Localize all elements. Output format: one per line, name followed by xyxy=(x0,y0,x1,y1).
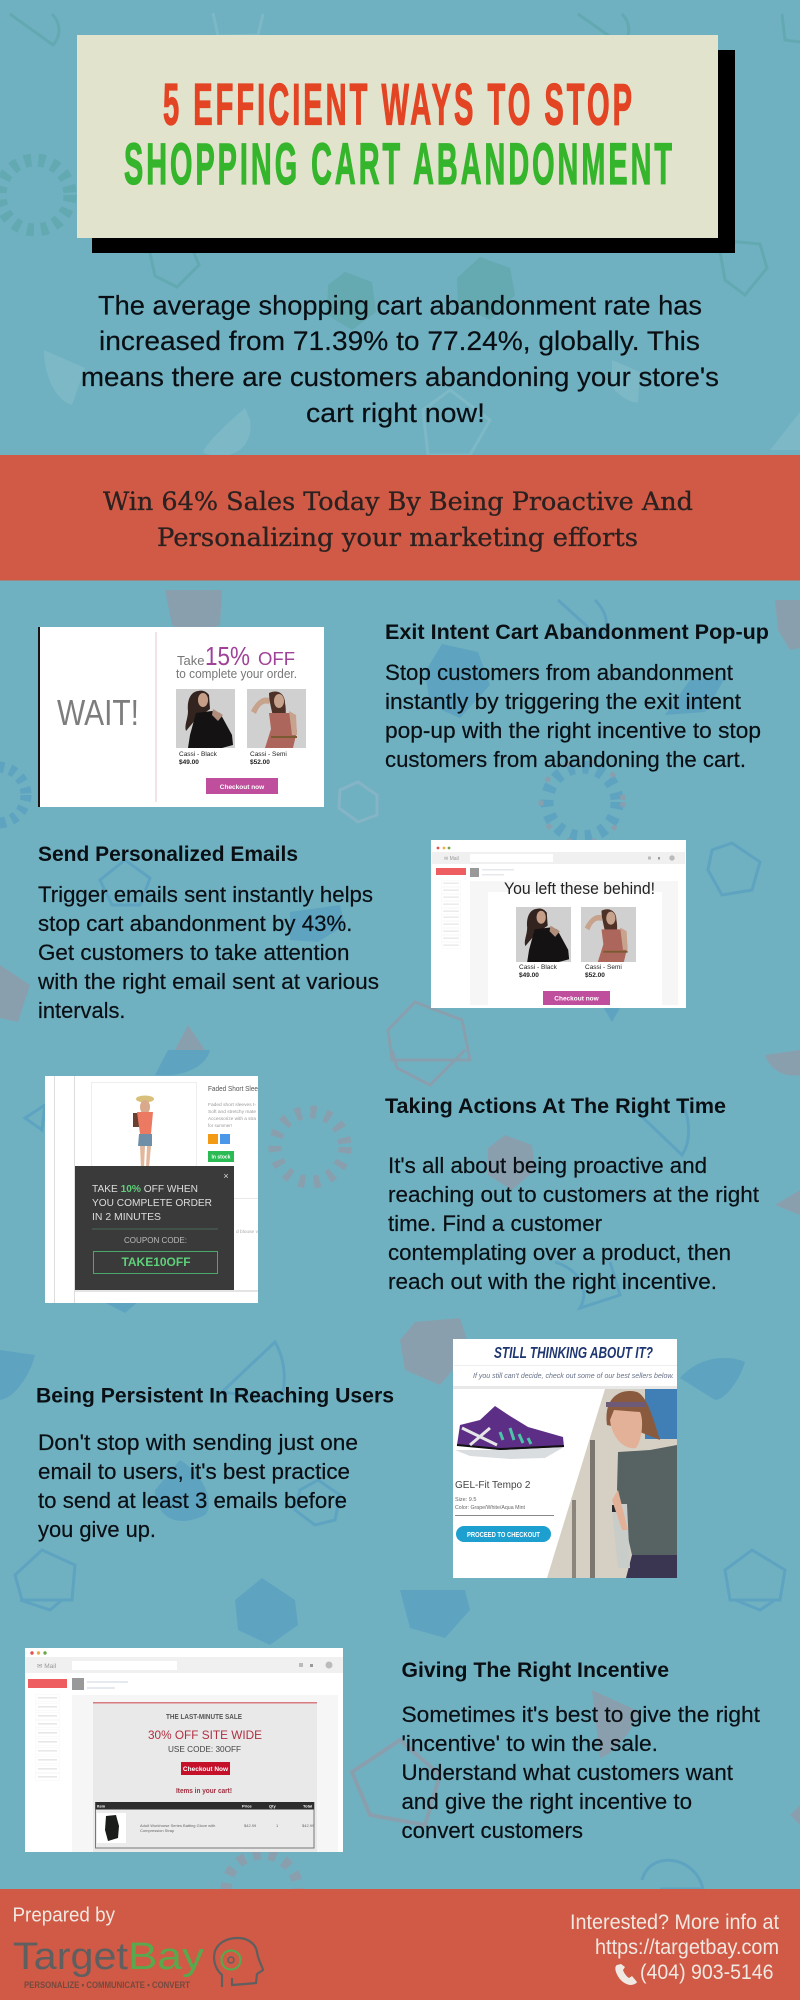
section 1 text xyxy=(385,621,769,772)
section 2 body: intervals. xyxy=(38,998,126,1023)
screenshot: personalized email: Checkout now xyxy=(554,996,600,1002)
items table xyxy=(96,1802,315,1848)
section 4 body: email to users, it's best practice xyxy=(38,1459,350,1484)
section 4 text xyxy=(36,1384,394,1542)
screenshot: 30% off email: 30% OFF SITE WIDE xyxy=(148,1728,262,1742)
screenshot: coupon popup xyxy=(45,1076,259,1303)
section 2 body: stop cart abandonment by 43%. xyxy=(38,911,352,936)
screenshot: personalized email xyxy=(431,840,686,1008)
section 5 body: convert customers xyxy=(402,1818,583,1843)
screenshot: personalized email: Cassi - Black xyxy=(519,964,558,971)
section 4 heading: Being Persistent In Reaching Users xyxy=(36,1384,394,1408)
section 4 body: you give up. xyxy=(38,1517,156,1542)
screenshot: still thinking email: Color: Grape/White/Aqua Mint xyxy=(455,1505,525,1511)
title panel shadow xyxy=(92,50,735,253)
screenshot: exit intent pop-up xyxy=(38,627,324,807)
TargetBay logo: Target xyxy=(13,1936,128,1978)
section 4 body: Don't stop with sending just one xyxy=(38,1430,358,1455)
coupon popup: TAKE10OFF xyxy=(121,1255,191,1269)
section 3 body: reaching out to customers at the right xyxy=(388,1182,759,1207)
section 3 heading: Taking Actions At The Right Time xyxy=(385,1095,726,1118)
intro text: cart right now! xyxy=(306,398,485,428)
section 4 body: to send at least 3 emails before xyxy=(38,1488,347,1513)
section 5 body: and give the right incentive to xyxy=(402,1789,692,1814)
items table: $42.99 xyxy=(302,1823,315,1828)
screenshot: coupon popup: Soft and stretchy mate xyxy=(208,1109,257,1114)
screenshot: still thinking email: If you still can't decide, check out some of our best sellers below. xyxy=(473,1371,674,1380)
screenshot: coupon popup: d blouse v xyxy=(236,1229,259,1234)
TargetBay logo xyxy=(13,1936,263,1990)
coupon popup xyxy=(75,1166,234,1290)
screenshot: exit intent pop-up: $52.00 xyxy=(250,759,270,766)
screenshot: personalized email: $49.00 xyxy=(519,972,539,979)
items table: Qty xyxy=(269,1804,276,1808)
title panel xyxy=(77,35,735,253)
section 3 body xyxy=(388,1153,759,1294)
coupon popup: COUPON CODE: xyxy=(124,1235,187,1245)
screenshot: coupon popup: Faded short sleeves t- xyxy=(208,1102,257,1107)
lower shapes xyxy=(155,1050,210,1076)
items table: Item xyxy=(97,1804,106,1808)
screenshot: personalized email: You left these behind! xyxy=(504,879,655,898)
screenshot: exit intent pop-up: to complete your order. xyxy=(176,667,297,681)
contact info: (404) 903-5146 xyxy=(640,1961,774,1984)
screenshot: coupon popup: for summer! xyxy=(208,1123,232,1128)
banner text: Personalizing your marketing efforts xyxy=(157,523,638,552)
items table: Compression Strap xyxy=(140,1828,175,1833)
section 2 body: Trigger emails sent instantly helps xyxy=(38,882,373,907)
screenshot: 30% off email: Items in your cart! xyxy=(176,1786,232,1795)
section 1 body xyxy=(385,660,761,772)
contact info: Interested? More info at xyxy=(570,1911,779,1934)
coupon popup: TAKE 10% OFF WHEN xyxy=(92,1183,198,1195)
screenshot: coupon popup: Accessorize with a stra xyxy=(208,1116,257,1121)
section 5 body: Understand what customers want xyxy=(402,1760,733,1785)
section 5 text xyxy=(402,1659,760,1843)
section 5 body: 'incentive' to win the sale. xyxy=(402,1731,658,1756)
screenshot: exit intent pop-up: Cassi - Semi xyxy=(250,751,287,758)
screenshot: still thinking email: GEL-Fit Tempo 2 xyxy=(455,1480,531,1491)
screenshot: exit intent pop-up: Cassi - Black xyxy=(179,751,218,758)
section 2 body: with the right email sent at various xyxy=(37,969,379,994)
section 3 body: time. Find a customer xyxy=(388,1211,602,1236)
TargetBay logo: PERSONALIZE • COMMUNICATE • CONVERT xyxy=(24,1980,190,1990)
coupon popup: IN 2 MINUTES xyxy=(92,1211,161,1223)
intro text xyxy=(81,290,719,428)
section 2 body: Get customers to take attention xyxy=(38,940,350,965)
contact info xyxy=(570,1911,779,1984)
section 1 body: customers from abandoning the cart. xyxy=(385,747,746,772)
screenshot: exit intent pop-up: Take xyxy=(177,653,204,668)
section 5 heading: Giving The Right Incentive xyxy=(402,1659,669,1682)
screenshot: 30% off email: ✉ Mail xyxy=(37,1663,57,1670)
model xyxy=(133,1096,154,1168)
section 3 text xyxy=(385,1095,759,1294)
coupon popup: × xyxy=(223,1171,229,1181)
prepared by: Prepared by xyxy=(12,1904,115,1926)
items table: $42.99 xyxy=(244,1823,257,1828)
red banner xyxy=(0,455,800,580)
screenshot: coupon popup: In stock xyxy=(212,1154,231,1160)
section 1 body: Stop customers from abandonment xyxy=(385,660,733,685)
screenshot: coupon popup: Faded Short Slee xyxy=(208,1084,258,1093)
footer xyxy=(0,1889,800,2000)
section 2 heading: Send Personalized Emails xyxy=(38,843,298,866)
screenshot: still thinking email xyxy=(453,1339,677,1578)
coupon popup: YOU COMPLETE ORDER xyxy=(92,1197,212,1209)
screenshot: 30% off email xyxy=(25,1648,343,1852)
photo: athlete xyxy=(547,1389,677,1578)
screenshot: still thinking email: PROCEED TO CHECKOUT xyxy=(467,1532,541,1539)
section 3 body: contemplating over a product, then xyxy=(388,1240,731,1265)
mid shapes xyxy=(165,590,222,636)
title panel box xyxy=(77,35,718,238)
screenshot: 30% off email: THE LAST-MINUTE SALE xyxy=(166,1714,242,1721)
section 3 body: It's all about being proactive and xyxy=(388,1153,707,1178)
intro text: The average shopping cart abandonment rate has xyxy=(98,290,702,320)
items table: Total xyxy=(303,1804,312,1808)
intro text: increased from 71.39% to 77.24%, globally. This xyxy=(99,326,700,356)
section 1 body: pop-up with the right incentive to stop xyxy=(385,718,761,743)
section 2 text xyxy=(37,843,379,1023)
dashed ring top left xyxy=(0,160,70,230)
banner text xyxy=(103,487,693,552)
section 3 body: reach out with the right incentive. xyxy=(388,1269,717,1294)
screenshot: still thinking email: STILL THINKING ABOUT IT? xyxy=(494,1345,653,1362)
section 5 body: Sometimes it's best to give the right xyxy=(402,1702,760,1727)
screenshot: personalized email: Cassi - Semi xyxy=(585,964,622,971)
screenshot: exit intent pop-up: $49.00 xyxy=(179,759,199,766)
items table: Adult Workhorse Series Batting Glove with xyxy=(140,1823,215,1828)
items table: 1 xyxy=(276,1823,279,1828)
section 2 body xyxy=(37,882,379,1023)
screenshot: 30% off email: Checkout Now xyxy=(183,1766,229,1773)
contact info: https://targetbay.com xyxy=(595,1936,779,1959)
shoe xyxy=(455,1406,564,1459)
icon: phone xyxy=(615,1964,637,1985)
section 4 body xyxy=(38,1430,358,1542)
top green shapes xyxy=(10,13,800,295)
screenshot: exit intent pop-up: Checkout now xyxy=(220,784,265,791)
screenshot: 30% off email: USE CODE: 30OFF xyxy=(168,1744,241,1754)
section 5 body xyxy=(402,1702,760,1843)
screenshot: exit intent pop-up: OFF xyxy=(258,648,295,669)
items table: Price xyxy=(242,1804,253,1808)
screenshot: personalized email: ✉ Mail xyxy=(444,856,459,862)
screenshot: still thinking email: Size: 9.5 xyxy=(455,1497,476,1503)
section 1 body: instantly by triggering the exit intent xyxy=(385,689,741,714)
icon: head xyxy=(214,1938,263,1987)
screenshot: personalized email: $52.00 xyxy=(585,972,605,979)
banner text: Win 64% Sales Today By Being Proactive And xyxy=(103,487,693,516)
screenshot: exit intent pop-up: WAIT! xyxy=(57,692,139,733)
intro text: means there are customers abandoning your store's xyxy=(81,362,719,392)
screenshot: exit intent pop-up: 15% xyxy=(205,641,250,671)
section 1 heading: Exit Intent Cart Abandonment Pop-up xyxy=(385,621,769,644)
TargetBay logo: Bay xyxy=(128,1936,204,1978)
